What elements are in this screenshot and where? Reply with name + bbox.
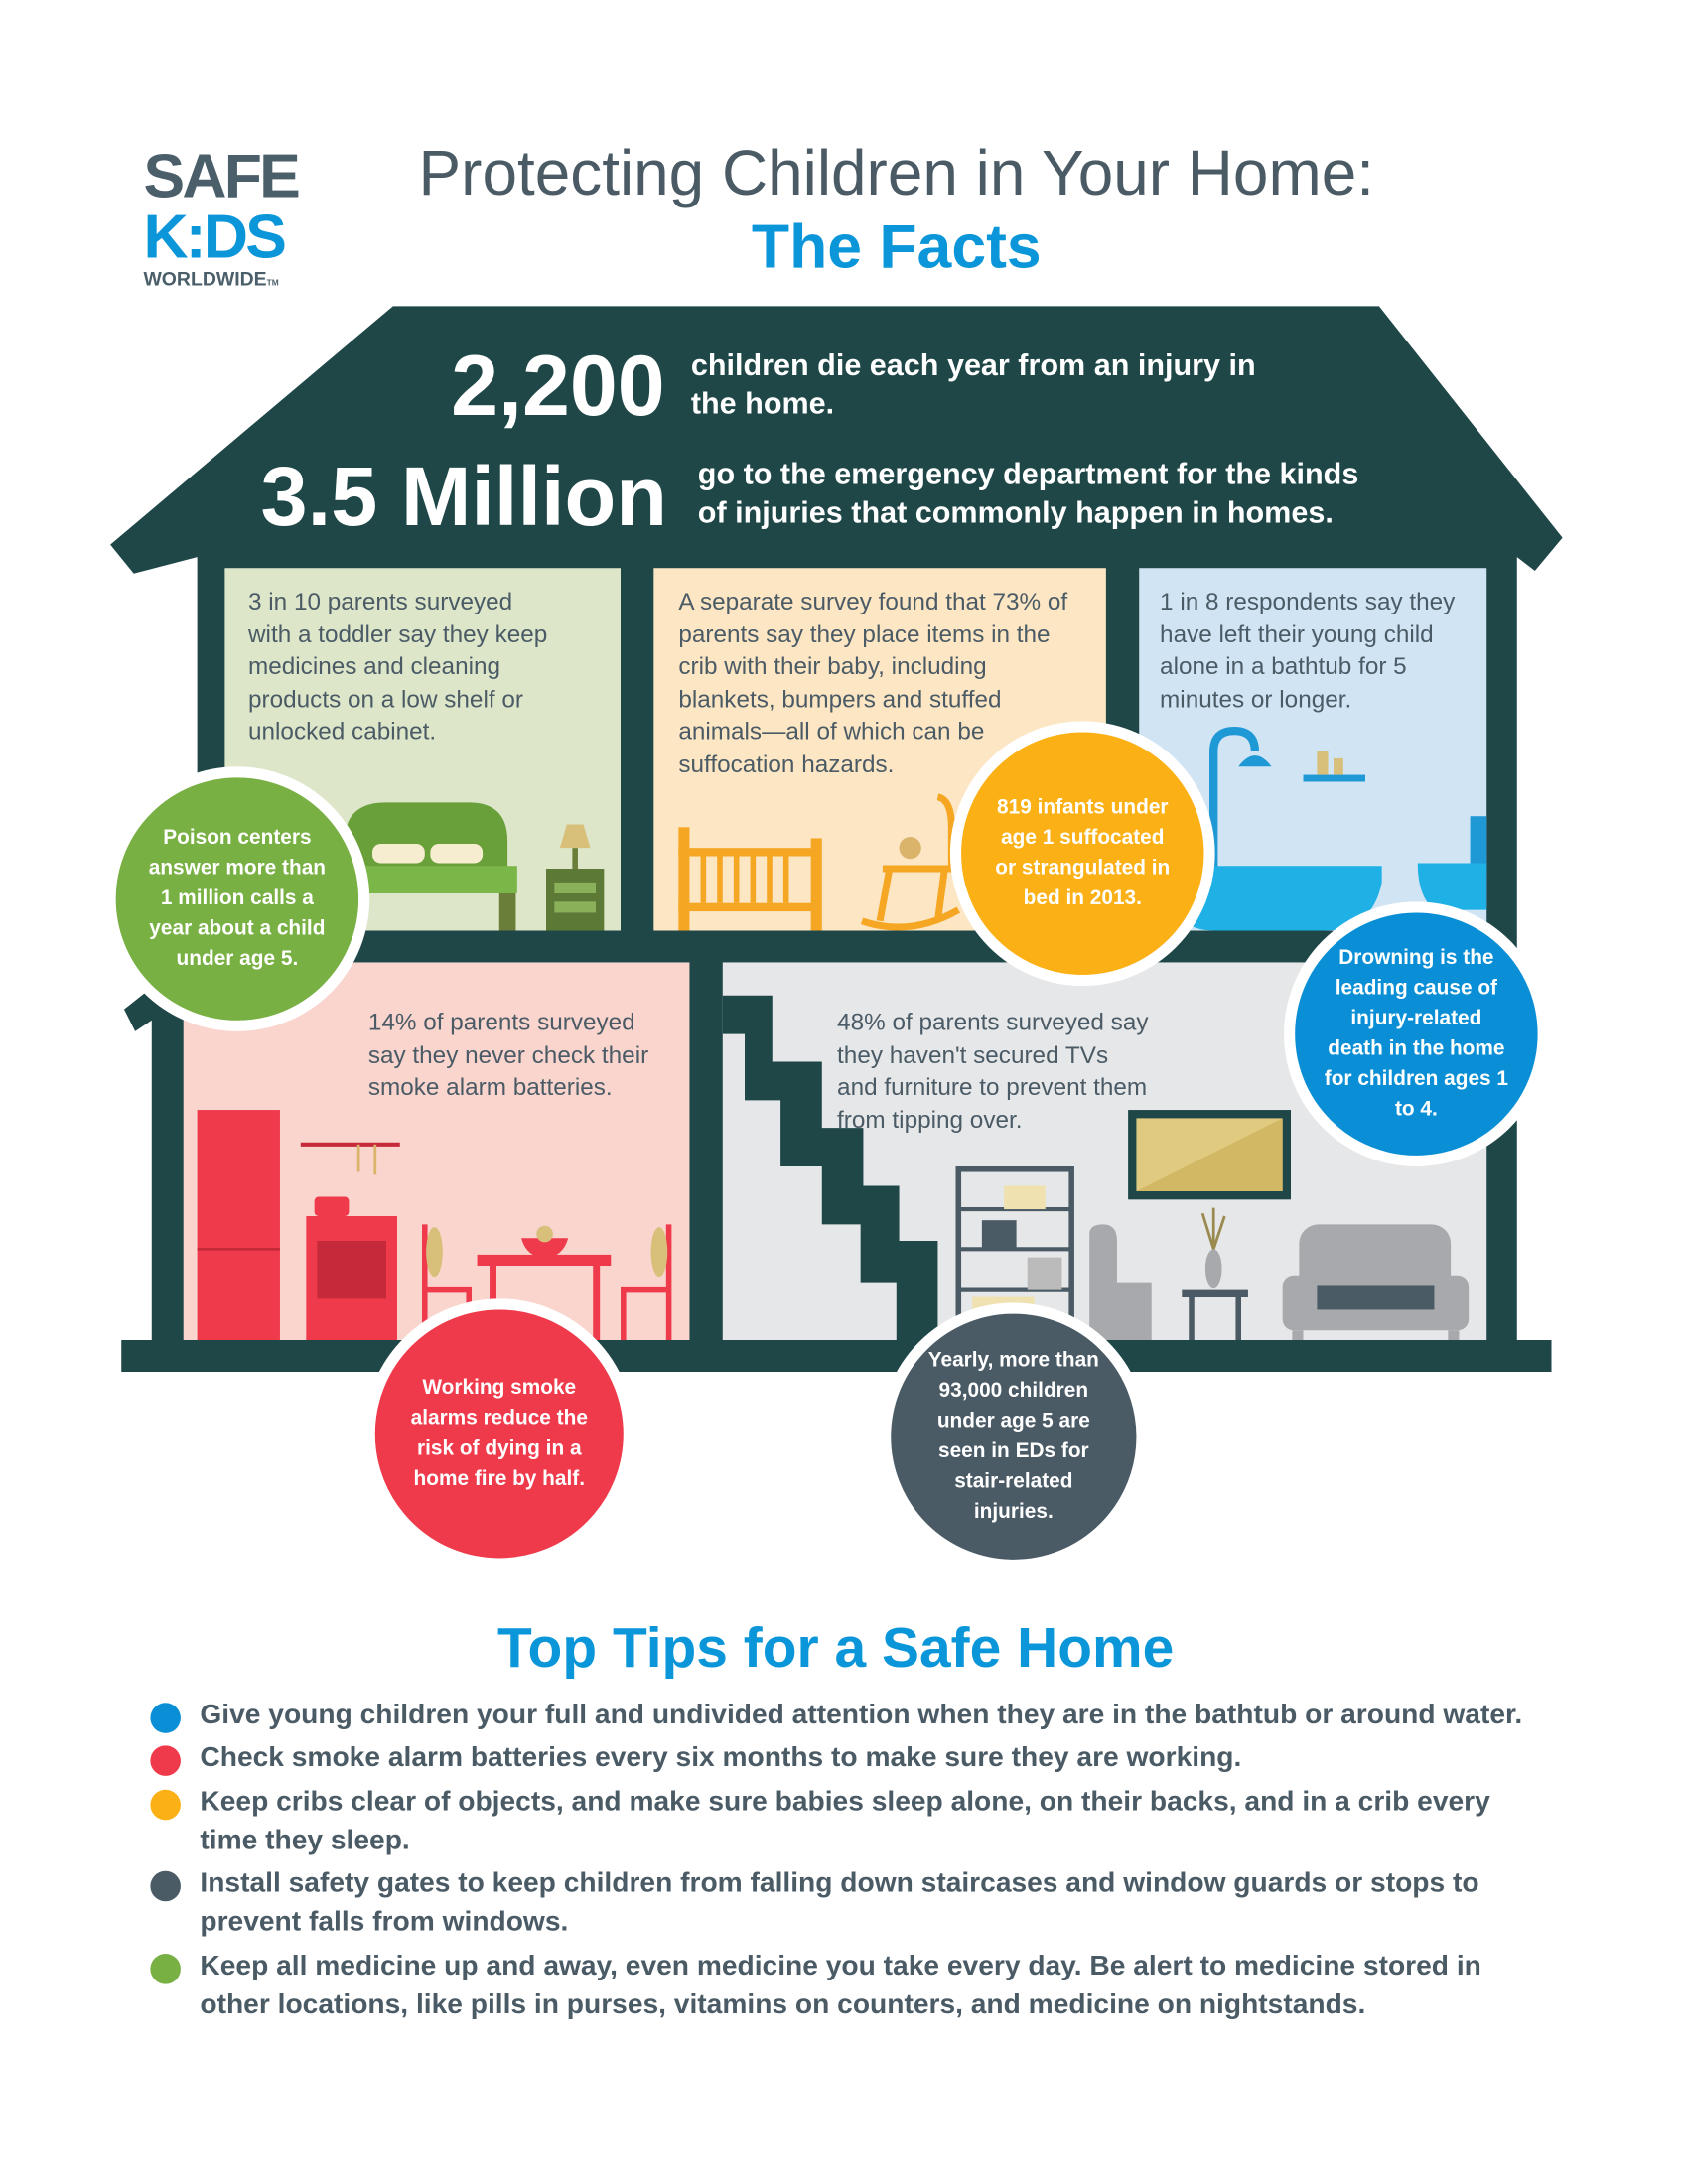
text: crib: A separate survey found that 73% of parents say they place items in the crib with their baby, including blankets, bumpers and stuffed animals—all of which can be suffocation hazards. — [678, 588, 1067, 777]
stat 2,200 — [451, 340, 1256, 435]
tips heading: Top Tips for a Safe Home — [497, 1616, 1174, 1680]
circle: smoke alarms: Working smoke alarms reduce the risk of dying in a home fire by half. — [411, 1376, 588, 1490]
stat 2,200: children die each year from an injury in the home. — [691, 347, 1256, 421]
logo — [143, 141, 298, 290]
tips list — [150, 1701, 1522, 2020]
stat 3.5 Million — [261, 450, 1358, 543]
text: medicines: 3 in 10 parents surveyed with a toddler say they keep medicines and cleaning products on a low shelf or unlocked cabinet. — [248, 588, 547, 746]
side table vase — [1182, 1290, 1248, 1297]
circle: infants — [950, 721, 1215, 986]
rocking chair — [862, 797, 958, 927]
tips list: Check smoke alarm batteries every six months to make sure they are working. — [200, 1743, 1241, 1773]
text: bathtub: 1 in 8 respondents say they have left their young child alone in a bathtub for 5 minutes or longer. — [1160, 588, 1455, 713]
text: smoke alarm: 14% of parents surveyed say they never check their smoke alarm batteries. — [368, 1008, 648, 1101]
stat 2,200: 2,200 — [451, 340, 665, 435]
tips list: Give young children your full and undivided attention when they are in the bathtub or around water. — [200, 1701, 1522, 1730]
bed — [345, 802, 507, 883]
bathtub & toilet — [1166, 866, 1382, 931]
circle: poison: Poison centers answer more than 1 million calls a year about a child under age 5. — [149, 826, 326, 971]
table chairs — [478, 1255, 611, 1266]
circle: stairs: Yearly, more than 93,000 children under age 5 are seen in EDs for stair-related injuries. — [928, 1348, 1099, 1524]
stat 3.5 Million: 3.5 Million — [261, 450, 667, 543]
circle: drowning — [1284, 901, 1549, 1166]
TV — [1128, 1110, 1291, 1199]
tips list: Install safety gates to keep children from falling down staircases and window guards or stops to prevent falls from windows. — [200, 1868, 1479, 1937]
logo: SAFE — [143, 141, 298, 211]
sofa — [1299, 1224, 1451, 1307]
tips list: Keep cribs clear of objects, and make sure babies sleep alone, on their backs, and in a crib every time they sleep. — [200, 1787, 1490, 1855]
logo: WORLDWIDETM — [143, 267, 279, 290]
stairs — [723, 996, 937, 1340]
nightstand lamp — [560, 825, 590, 848]
bookshelf — [958, 1169, 1071, 1318]
text: TVs: 48% of parents surveyed say they haven't secured TVs and furniture to prevent them from tipping over. — [837, 1008, 1149, 1133]
title: The Facts — [752, 211, 1042, 281]
stove — [315, 1197, 349, 1216]
tips list: Keep all medicine up and away, even medicine you take every day. Be alert to medicine stored in other locations, like pills in purses, vitamins on counters, and medicine on nightstands. — [200, 1951, 1481, 2020]
fridge — [198, 1110, 280, 1340]
armchair — [1089, 1224, 1152, 1340]
circle: smoke alarms — [364, 1298, 634, 1570]
utensils rack — [301, 1143, 400, 1146]
shower — [1213, 731, 1255, 883]
stat 3.5 Million: go to the emergency department for the kinds of injuries that commonly happen in homes. — [698, 457, 1358, 529]
crib — [678, 827, 822, 931]
logo: K:DS — [143, 202, 284, 272]
title: Protecting Children in Your Home: — [419, 137, 1374, 208]
circle: drowning: Drowning is the leading cause of injury-related death in the home for children ages 1 to 4. — [1325, 946, 1508, 1121]
circle: stairs — [880, 1303, 1148, 1570]
circle: infants: 819 infants under age 1 suffocated or strangulated in bed in 2013. — [995, 795, 1170, 910]
circle: poison — [105, 766, 369, 1031]
title — [419, 137, 1374, 281]
